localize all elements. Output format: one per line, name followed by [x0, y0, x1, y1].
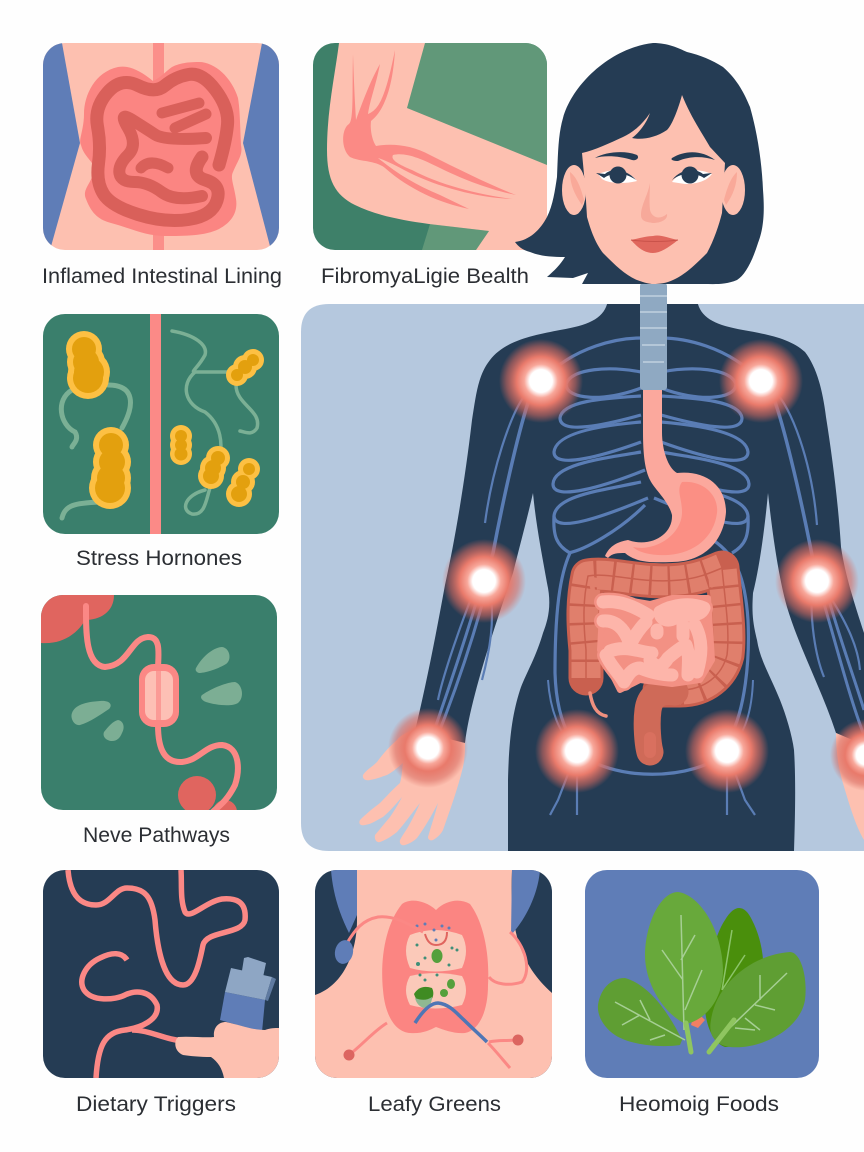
card: fibromyalgia — [313, 43, 547, 250]
label: inflamed intestinal lining: Inflamed Intestinal Lining — [42, 265, 282, 288]
large intestine — [584, 568, 728, 752]
nerve line — [86, 606, 238, 815]
bacteria — [66, 331, 264, 509]
nerve capsule — [139, 664, 179, 727]
spinach leaves — [598, 892, 806, 1052]
ears — [562, 165, 745, 215]
left hand — [359, 730, 465, 845]
ribcage and nerves — [428, 338, 864, 815]
trachea — [640, 283, 667, 390]
card: heomoig foods — [585, 870, 819, 1078]
inhaler — [220, 957, 276, 1032]
card: nerve pathways — [41, 595, 277, 824]
figure: woman anatomy — [359, 43, 864, 851]
right hand — [836, 733, 864, 840]
organ — [382, 901, 488, 1033]
hair back — [515, 43, 764, 284]
esophagus and stomach — [605, 390, 726, 562]
background panel — [301, 304, 864, 851]
card: stress hormones — [43, 314, 279, 534]
flagella — [61, 331, 258, 518]
label: fibromyalgia: FibromyaLigie Bealth — [321, 265, 529, 288]
connecting vessels — [347, 917, 527, 1068]
leaves — [71, 647, 242, 741]
hand — [175, 1022, 279, 1078]
label: nerve pathways: Neve Pathways — [83, 824, 230, 847]
label: heomoig foods: Heomoig Foods — [619, 1093, 779, 1116]
body silhouette — [414, 280, 864, 851]
card: leafy greens — [315, 870, 552, 1078]
facial features — [595, 152, 715, 253]
card: dietary triggers — [43, 870, 279, 1078]
card: inflamed intestinal lining — [43, 43, 279, 250]
inflammation glows — [388, 339, 864, 793]
intestine illustration — [80, 62, 241, 236]
label: leafy greens: Leafy Greens — [368, 1093, 501, 1116]
label: dietary triggers: Dietary Triggers — [76, 1093, 236, 1116]
face — [582, 95, 725, 284]
small intestine — [600, 596, 712, 690]
label: stress hormones: Stress Hornones — [76, 547, 242, 570]
winding gut line — [68, 870, 245, 985]
arm illustration — [327, 43, 547, 250]
